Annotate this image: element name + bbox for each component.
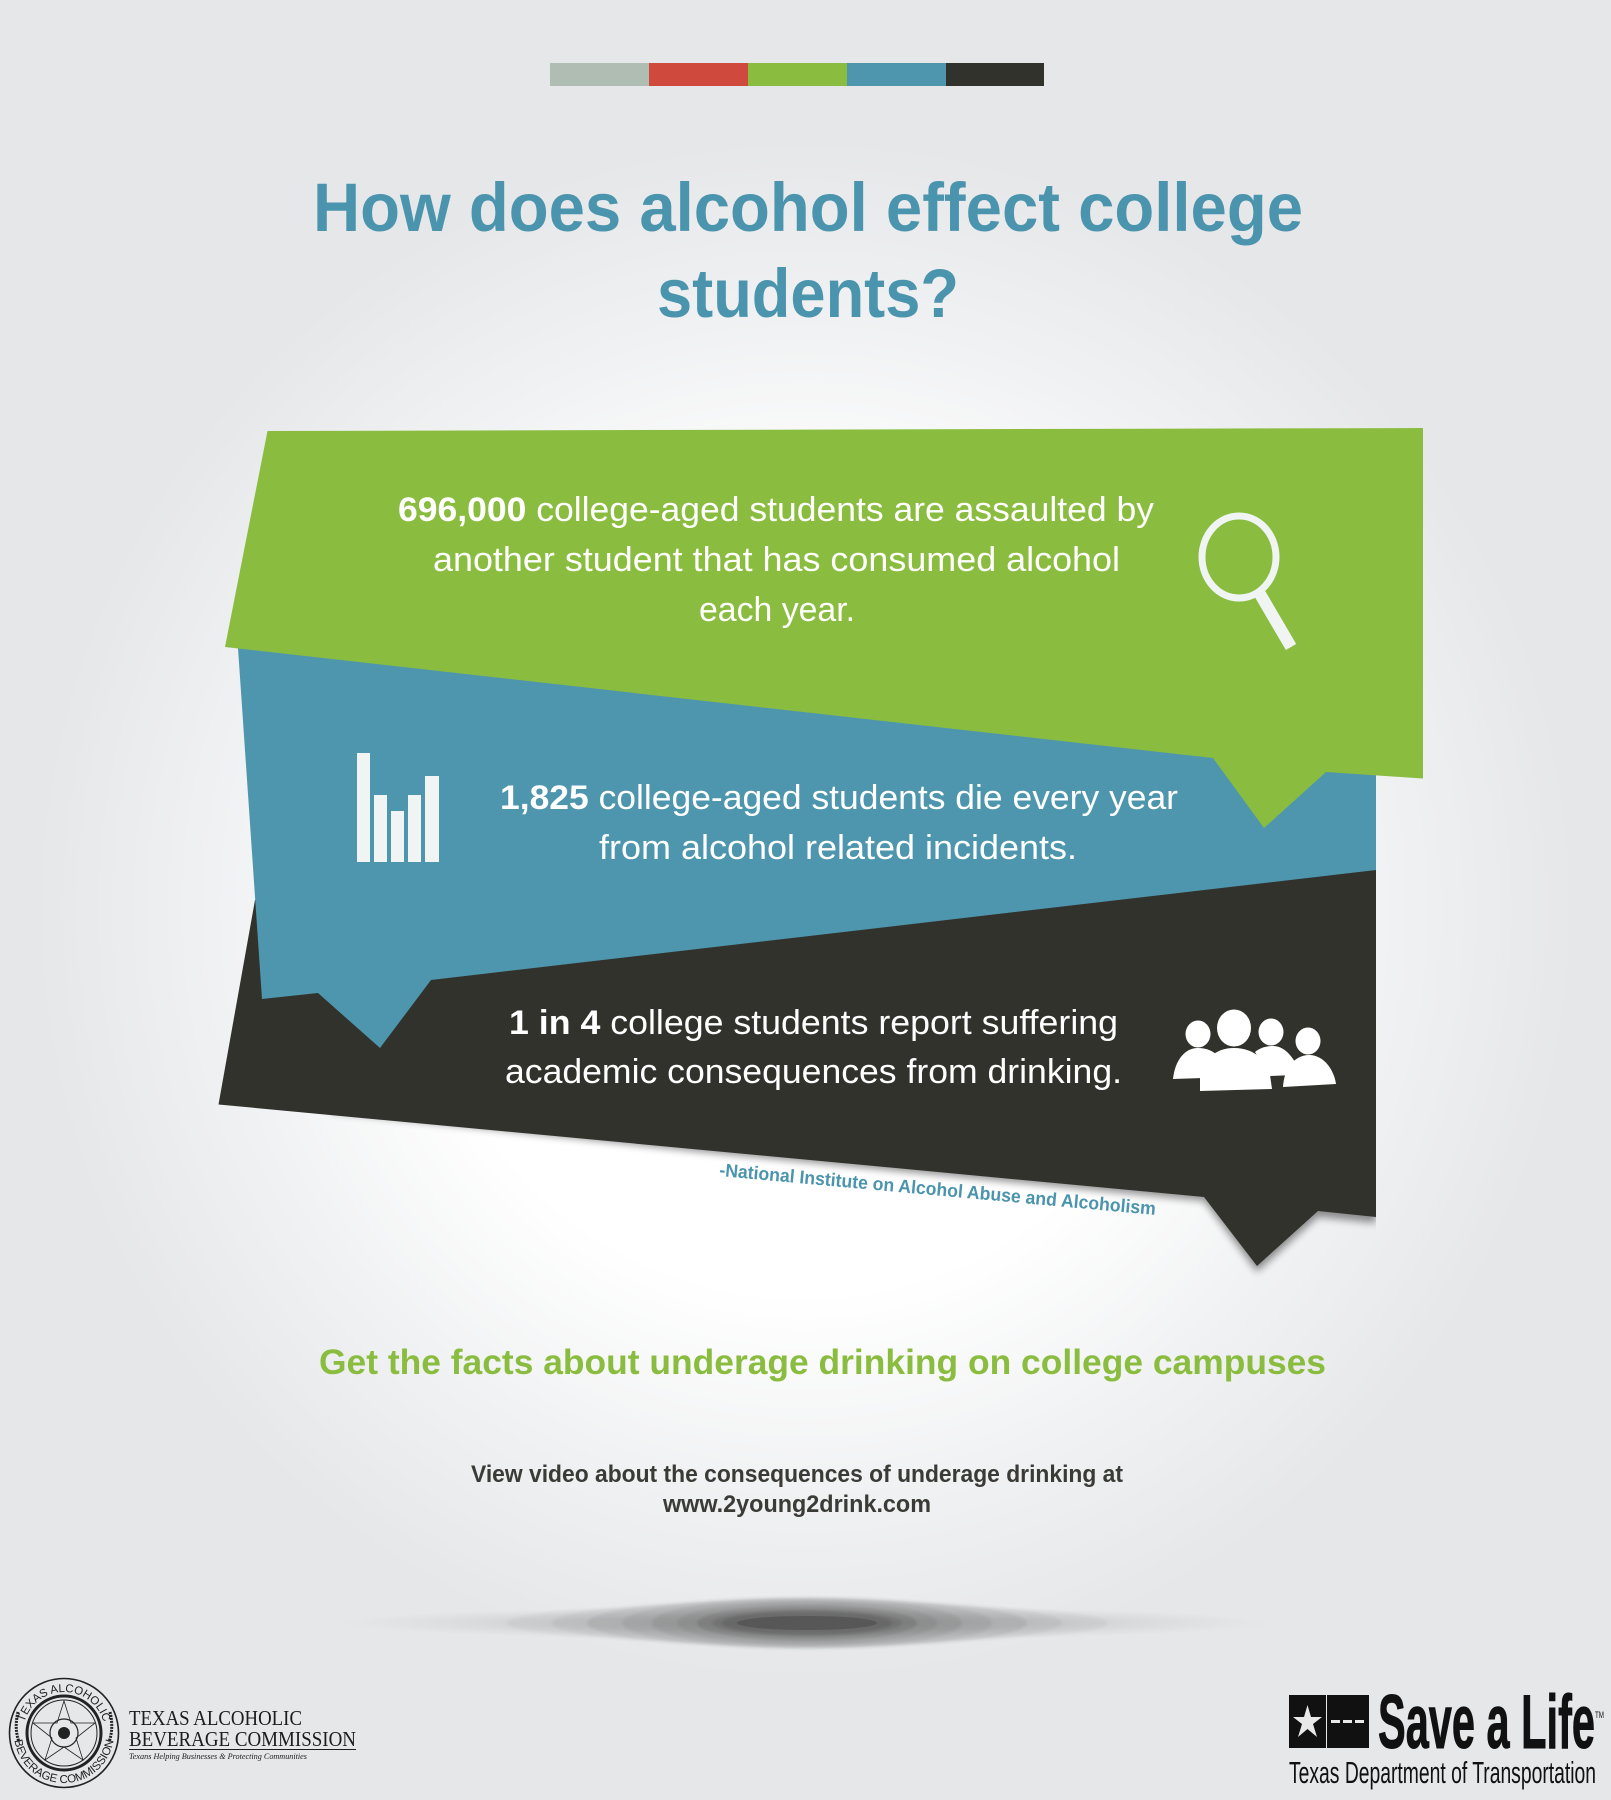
seal: TEXAS ALCOHOLIC <box>17 1684 110 1721</box>
agency name <box>129 1706 356 1761</box>
seal <box>8 1678 120 1788</box>
statistic: assaults per year: 696,000 college-aged students are assaulted by <box>398 491 1155 529</box>
logo: Texas Alcoholic Beverage Commission <box>8 1678 356 1788</box>
agency name: Texans Helping Businesses & Protecting Communities <box>129 1752 307 1761</box>
panel: green speech banner <box>225 428 1423 828</box>
video note: www.2young2drink.com <box>662 1491 931 1518</box>
agency name: BEVERAGE COMMISSION <box>129 1727 356 1751</box>
logo: Save a Life, Texas Department of Transportation: TM <box>1595 1710 1604 1720</box>
seal: BEVERAGE COMMISSION <box>14 1740 114 1784</box>
flag boxes <box>1289 1695 1369 1748</box>
panel: blue speech banner <box>238 648 1376 1048</box>
statistic: assaults per year: each year. <box>699 591 855 629</box>
video note <box>471 1461 1123 1518</box>
agency name: TEXAS ALCOHOLIC <box>129 1706 302 1730</box>
icon: group of people <box>1173 1010 1336 1091</box>
call to action heading: Get the facts about underage drinking on college campuses <box>319 1342 1326 1382</box>
source credit: -National Institute on Alcohol Abuse and Alcoholism <box>719 1159 1157 1219</box>
statistic: deaths per year: 1,825 college-aged students die every year <box>500 779 1178 817</box>
statistic: academic consequences: academic consequences from drinking. <box>505 1053 1122 1091</box>
title: How does alcohol effect college <box>313 169 1303 246</box>
title <box>313 169 1303 332</box>
statistic: deaths per year: from alcohol related incidents. <box>599 829 1077 867</box>
statistic: deaths per year <box>500 779 1178 867</box>
colour strip <box>550 63 1044 86</box>
statistic: assaults per year <box>398 491 1155 629</box>
floor shadow <box>342 1597 1272 1649</box>
statistic: academic consequences <box>505 1004 1122 1091</box>
video note: View video about the consequences of underage drinking at <box>471 1461 1123 1488</box>
panel: black speech banner <box>218 870 1376 1272</box>
icon: magnifying glass <box>1202 516 1291 647</box>
statistic: assaults per year: another student that has consumed alcohol <box>433 541 1120 579</box>
title: students? <box>657 255 959 332</box>
icon: bar chart <box>357 753 439 862</box>
statistic: academic consequences: 1 in 4 college students report suffering <box>509 1004 1118 1042</box>
logo: Save a Life, Texas Department of Transportation <box>1289 1680 1604 1790</box>
